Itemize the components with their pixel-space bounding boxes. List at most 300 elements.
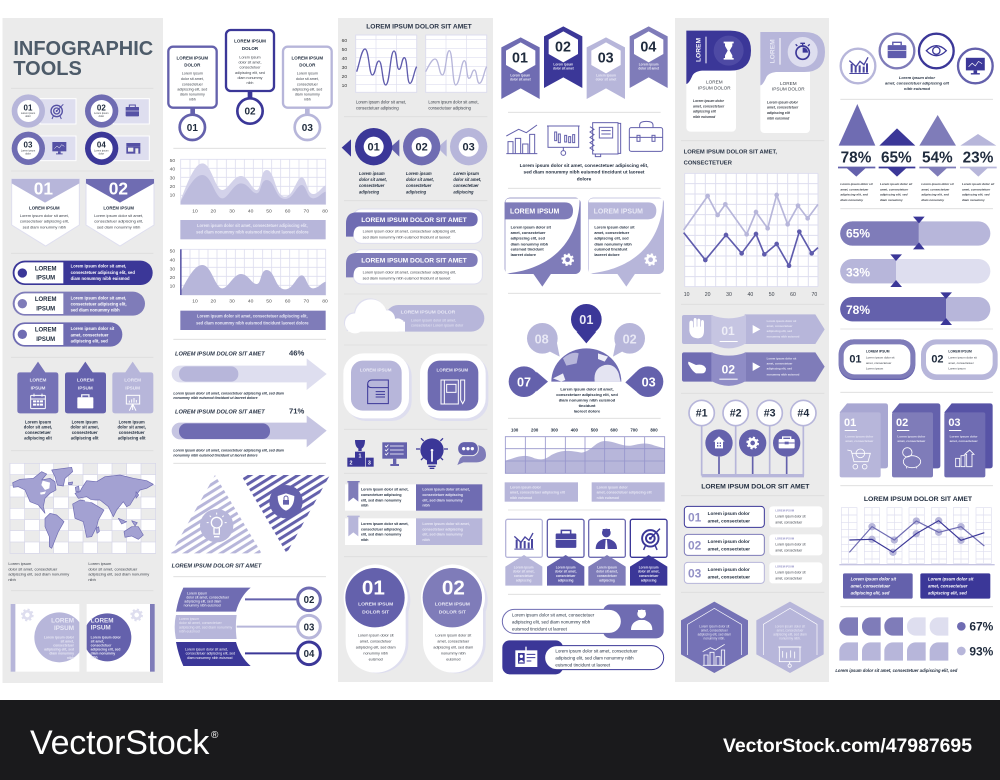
speech card 2: diam nonummy nibh	[594, 242, 632, 246]
area chart 1	[170, 158, 328, 214]
pill labels: consectetuer adipiscing elit,	[71, 301, 127, 306]
speech card 1: amet, consectetuer	[511, 231, 546, 235]
tab card: hourglass: Lorem ipsum dolor	[693, 99, 725, 103]
icon: trophy podium: 2	[350, 460, 353, 466]
pill card 02	[921, 339, 998, 380]
triangle percentage chart: Lorem ipsum dolor sit	[880, 182, 913, 186]
lollipop card 02	[421, 564, 488, 673]
numbered circle badges: 04	[97, 140, 106, 149]
area chart 2: 70	[304, 299, 309, 305]
triangle percentage chart: Lorem ipsum dolor sit	[840, 182, 874, 186]
numbered callouts: dolor sit amet,	[181, 77, 204, 81]
numbered circle badges: 01	[24, 103, 33, 112]
icon: trophy podium: 1	[359, 454, 362, 460]
numbered arrow steps: consectetuer	[406, 183, 432, 188]
numbered callouts: adipiscing elit, sed	[235, 71, 265, 75]
numbered arrow steps: Lorem ipsum	[453, 171, 479, 176]
step row 01	[682, 314, 825, 348]
ribbon row 2: elit, sed diam nonummy	[422, 533, 463, 537]
dual line chart	[684, 173, 818, 298]
list row 03: Lorem ipsum dolor sit	[775, 571, 806, 575]
tabbed icon cards: Lorem ipsum	[72, 419, 98, 424]
list row 02: Lorem ipsum dolor	[708, 539, 750, 544]
column 5 top	[681, 31, 825, 348]
area chart 1: 20	[170, 184, 175, 190]
curved list: Lorem ipsum dolor sit amet,	[185, 648, 228, 652]
shield cards: consectetuer adipiscing elit,	[94, 219, 143, 224]
area chart 2	[170, 249, 328, 305]
column 6 top	[838, 34, 997, 329]
shield cards: sed diam nonummy nibh	[23, 224, 66, 229]
icon: pointing hand	[688, 362, 706, 373]
list row 02: amet, consectetuer	[708, 547, 750, 552]
ribbon row 2: Lorem ipsum dolor sit amet,	[422, 522, 470, 526]
pill card 01: Lorem ipsum	[866, 366, 884, 370]
caption bar 1	[180, 220, 326, 239]
icon: presentation board	[126, 395, 140, 411]
stacked card 01: 01	[844, 417, 856, 429]
area chart 1: 50	[170, 158, 175, 164]
list row 03: amet, consectetuer	[708, 575, 750, 580]
list row 03	[684, 562, 822, 583]
lollipop card 02: LOREM IPSUM	[435, 602, 470, 608]
icon tiles with pentagons: consectetuer	[639, 574, 659, 578]
area chart with top axis: 700	[630, 427, 638, 432]
chart heading: LOREM IPSUM DOLOR SIT AMET	[864, 496, 973, 503]
profile callout 2: adipiscing elit, sed diam nonummy nibh	[555, 656, 634, 661]
globe caption: laoreet dolore	[574, 409, 601, 414]
dual line chart: 30	[726, 292, 732, 298]
numbered callouts: dolor sit amet,	[296, 77, 319, 81]
speech card 2: LOREM IPSUM	[594, 209, 643, 216]
pill card 01	[839, 339, 915, 380]
hash tree diagram	[689, 400, 816, 477]
pill labels: amet, consectetuer	[71, 332, 109, 337]
circle cards: IPSUM	[91, 624, 111, 631]
stacked card 02: 02	[896, 417, 908, 429]
curved list: Lorem ipsum	[179, 617, 199, 621]
numbered arrow steps: dolor sit amet,	[359, 177, 387, 182]
tab card: stopwatch: nibh euismod	[767, 116, 790, 120]
progress arrow 71%: 71%	[289, 406, 305, 415]
line charts: Lorem ipsum dolor sit amet,	[428, 99, 479, 104]
numbered circle badges	[12, 94, 149, 165]
area chart 2: 40	[248, 299, 254, 305]
circle cards: nibh	[91, 656, 98, 660]
numbered circle badges: 03	[24, 140, 33, 149]
triangle percentage chart: 78%	[841, 150, 872, 167]
lollipop card 01: nonummy nibh	[363, 652, 388, 656]
speech card 1: adipiscing elit, sed	[511, 237, 546, 241]
shield cards: Lorem ipsum dolor sit amet,	[94, 213, 143, 218]
tabbed icon cards: dolor sit amet,	[70, 425, 99, 430]
banner card 1: sed diam nonummy nibh euismod tincidunt ut laoreet	[363, 235, 451, 239]
triangle percentage chart: 23%	[963, 150, 994, 167]
lollipop card 02: Lorem ipsum dolor sit	[435, 634, 472, 638]
list row 03: amet, consectetuer	[775, 576, 802, 580]
tabbed icon cards: LOREM	[77, 378, 94, 383]
chart notes: amet, consectetuer adipiscing elit	[597, 491, 652, 495]
cloud callout	[344, 298, 484, 333]
tabbed icon cards: dolor sit amet,	[24, 425, 52, 430]
line charts: Lorem ipsum dolor sit amet,	[356, 99, 406, 104]
numbered callouts: DOLOR	[299, 63, 316, 68]
area chart 2: 20	[211, 299, 216, 305]
profile callout 1: euismod tincidunt ut laoreet	[512, 626, 568, 631]
icon: trophy podium: 3	[368, 460, 371, 466]
profile callout 1: Lorem ipsum dolor sit amet, consectetuer	[512, 613, 595, 618]
footer bar: VectorStock	[30, 724, 210, 762]
map captions: nibh	[8, 577, 16, 582]
banner card 2	[346, 250, 482, 284]
progress arrow 46%	[172, 349, 327, 400]
progress arrow 71%: nonummy nibh euismod tincidunt ut laoreet dolore	[173, 453, 258, 457]
area chart 2: 40	[170, 257, 175, 263]
lollipop card 01: 01	[362, 576, 385, 599]
circle cards: diam nonummy	[49, 652, 74, 656]
chart notes: nibh euismod	[597, 496, 619, 500]
triangle percentage chart: 65%	[881, 150, 912, 167]
hexagon card 1: nonummy nibh.	[704, 637, 725, 641]
icon tiles with pentagons: consectetuer	[556, 574, 576, 578]
map pin 08	[527, 323, 560, 357]
tab card: hourglass: LOREM	[695, 38, 702, 62]
pill labels: IPSUM	[36, 337, 55, 343]
list row 03: 03	[688, 567, 702, 581]
icon: candlestick board	[547, 126, 580, 155]
stacked card 02	[892, 403, 940, 477]
panel: column 1 background	[2, 18, 163, 683]
progress arrow 71%: Lorem ipsum dolor sit amet, consectetuer adipiscing elit, sed diam	[173, 449, 284, 453]
tab card: stopwatch: Lorem ipsum dolor	[767, 100, 799, 104]
step row 01: Lorem ipsum dolor sit	[767, 319, 796, 323]
line charts: 10	[342, 83, 347, 89]
numbered callouts	[168, 30, 332, 140]
globe caption	[556, 386, 618, 414]
area chart with top axis: 400	[571, 427, 579, 432]
pill card 01: LOREM IPSUM	[866, 349, 890, 353]
stacked card 01: amet, consectetuer	[845, 439, 874, 443]
icon tiles with pentagons: Lorem ipsum	[597, 565, 617, 569]
triangle percentage chart: diam nonummy	[962, 198, 985, 202]
map captions: Lorem ipsum	[8, 561, 32, 566]
pill labels: IPSUM	[36, 276, 55, 282]
circle cards: nibh	[67, 656, 74, 660]
hexagon card 1: amet, consectetuer	[701, 629, 728, 633]
pill card 01: amet, consectetuer	[866, 361, 891, 365]
stacked card 02: amet, consectetuer	[897, 439, 926, 443]
lollipop card 02: DOLOR SIT	[439, 610, 466, 616]
closing caption: Lorem ipsum dolor sit amet, consectetuer adipiscing elit, sed	[835, 668, 958, 673]
icon: chat bubbles	[457, 442, 486, 465]
shield cards: LOREM IPSUM	[103, 205, 134, 210]
curved list: dolor sit amet, consectetuer	[186, 595, 230, 599]
numbered arrow steps: consectetuer	[359, 183, 385, 188]
icon tile: book: LOREM IPSUM	[360, 368, 392, 373]
icon circles	[841, 34, 993, 91]
hexagon ribbons: Lorem ipsum	[553, 62, 573, 66]
pill labels: Lorem ipsum dolor sit amet,	[71, 295, 126, 300]
column 2 top	[168, 30, 332, 339]
dual line chart: 70	[811, 292, 817, 298]
tab card: stopwatch: LOREM	[780, 81, 797, 86]
section heading: CONSECTETUER	[684, 161, 733, 167]
icon tiles with pentagons: Lorem ipsum	[514, 565, 534, 569]
line charts	[342, 35, 487, 111]
caption bar 2: Lorem ipsum dolor sit amet, consectetuer adipiscing elit,	[197, 314, 308, 319]
hexagon ribbons: 04	[640, 39, 656, 55]
area chart with top axis: 100	[511, 427, 519, 432]
triangle percentage chart	[838, 104, 997, 202]
icon tiles with pentagons: adipiscing	[516, 578, 532, 582]
circle cards: sit amet,	[60, 640, 74, 644]
lollipop card 01: DOLOR SIT	[362, 610, 389, 616]
list row 03: Lorem ipsum dolor	[708, 567, 750, 572]
step row 01: nonummy nibh euismod	[767, 335, 800, 339]
numbered circle badges: Lorem ipsum	[94, 149, 109, 152]
ribbon row 2: consectetuer adipiscing	[422, 527, 463, 531]
hexagon ribbons: dolor sit amet	[638, 67, 660, 71]
numbered callouts: DOLOR	[242, 46, 259, 51]
section heading: LOREM IPSUM DOLOR SIT AMET	[366, 24, 472, 31]
triangle percentage chart: diam nonummy	[880, 198, 903, 202]
numbered callouts: 03	[302, 123, 313, 134]
profile callout 2: euismod tincidunt ut laoreet	[555, 662, 611, 667]
icon circles: nibh euismod	[904, 86, 931, 91]
banner card 2: LOREM IPSUM DOLOR SIT AMET	[361, 258, 467, 265]
circle cards: diam nonummy	[91, 652, 115, 656]
cloud callout: consectetuer Lorem ipsum dolor	[411, 323, 464, 327]
triangle percentage chart: amet, consectetuer	[880, 187, 909, 191]
tabbed icon cards	[17, 362, 153, 440]
icon tiles with pentagons: consectetuer	[514, 574, 534, 578]
map captions: adipiscing elit, sed diam nonummy	[8, 572, 69, 577]
numbered circle badges: dolor	[25, 152, 31, 155]
numbered arrow steps	[342, 128, 487, 194]
dual line chart: 20	[705, 292, 711, 298]
list row 01: amet, consectetuer	[708, 519, 750, 524]
map pin 07	[509, 366, 548, 397]
hexagon ribbons: 02	[555, 39, 571, 55]
numbered arrow steps: 03	[463, 142, 475, 154]
map pin 03: 03	[642, 375, 656, 389]
hexagon card 2: Lorem ipsum dolor sit	[775, 625, 805, 629]
footer bar: ®	[211, 730, 219, 741]
ribbon row 2: Lorem ipsum dolor sit amet,	[361, 522, 409, 526]
dual line chart: 10	[684, 292, 690, 298]
lollipop card 01	[344, 564, 410, 673]
icon: hand	[689, 318, 704, 338]
column 1 top	[11, 38, 154, 347]
hexagon card 2: nonummy nibh.	[779, 637, 801, 641]
tabbed icon cards: LOREM	[124, 378, 141, 383]
icon: shield lock	[269, 485, 303, 518]
speech card 1: Lorem ipsum dolor sit	[511, 225, 552, 229]
icon: growth chart	[506, 125, 537, 154]
circle cards: Lorem ipsum dolor	[91, 636, 122, 640]
triangle percentage chart: amet, consectetuer	[962, 187, 991, 191]
section heading	[684, 149, 777, 167]
tabbed icon cards: IPSUM	[31, 386, 45, 391]
footer bar: VectorStock.com/47987695	[723, 735, 972, 757]
tabbed icon cards: Lorem ipsum	[119, 419, 145, 424]
triangle percentage chart: amet, consectetuer	[840, 187, 869, 191]
area chart with top axis	[505, 427, 665, 473]
step row 01: 01	[721, 324, 735, 338]
area chart 1: 40	[248, 208, 254, 214]
icon tiles with pentagons: adipiscing	[558, 578, 574, 582]
shield cards: LOREM IPSUM	[29, 205, 60, 210]
curved list: Lorem ipsum	[187, 591, 207, 595]
list row 01	[684, 506, 822, 527]
icon: notebook	[590, 123, 621, 157]
ribbon row 1: elit, sed diam nonummy	[422, 498, 463, 502]
stacked card 03: amet, consectetuer	[950, 439, 979, 443]
progress arrow 46%: LOREM IPSUM DOLOR SIT AMET	[175, 352, 265, 358]
step row 02: adipiscing elit, sed	[767, 367, 792, 371]
icon row caption: dolore	[577, 176, 592, 182]
numbered callouts: Lorem ipsum	[239, 56, 261, 60]
map pin 01	[571, 304, 602, 343]
ribbon row 2: elit, sed diam nonummy	[361, 533, 401, 537]
speech card 2: Lorem ipsum dolor sit	[594, 225, 635, 229]
banner card 1: Lorem ipsum dolor sit amet, consectetuer adipiscing elit,	[363, 230, 456, 234]
triangle percentage chart: adipiscing elit, sed	[962, 193, 990, 197]
hash tree diagram: #2	[730, 408, 742, 420]
circle cards: adipiscing elit, sed	[44, 648, 74, 652]
line charts: consectetuer adipiscing	[428, 106, 471, 111]
pictogram percentages	[839, 617, 994, 661]
area chart with top axis: 500	[591, 427, 599, 432]
icon tile: book	[343, 353, 412, 421]
icon: toolbox	[779, 437, 795, 448]
profile callout 1: adipiscing elit, sed diam nonummy nibh	[512, 620, 591, 625]
hexagon ribbons: dolor sit amet	[596, 78, 617, 82]
caption bar 2: sed diam nonummy nibh euismod tincidunt laoreet dolore	[196, 320, 309, 325]
circle cards: Lorem ipsum dolor	[44, 636, 75, 640]
numbered callouts: 01	[187, 123, 198, 134]
icon: house	[713, 436, 725, 448]
numbered circle badges: Lorem ipsum	[21, 149, 35, 152]
icon: id badge	[515, 647, 537, 667]
banner card 2: sed diam nonummy nibh euismod tincidunt ut laoreet	[363, 276, 451, 280]
numbered callouts: adipiscing elit, sed	[177, 88, 207, 92]
numbered circle badges: dolor	[99, 115, 104, 118]
pill labels: IPSUM	[36, 306, 55, 312]
ribbon row 1: consectetuer adipiscing	[422, 493, 463, 497]
map captions	[8, 561, 149, 582]
icon tiles with pentagons: adipiscing	[641, 578, 657, 582]
tab card: stopwatch: amet, consectetuer	[767, 106, 799, 110]
caption bar 1: sed diam nonummy nibh euismod tincidunt laoreet dolore	[196, 230, 309, 235]
chart captions: amet, consectetuer	[928, 583, 968, 588]
tabbed icon cards: consectetuer	[119, 430, 145, 435]
chart captions: adipiscing elit, sed	[928, 591, 967, 596]
chart captions: amet, consectetuer	[851, 583, 890, 588]
map captions: adipiscing elit, sed diam nonummy	[88, 572, 149, 577]
tab card: stopwatch: LOREM	[769, 39, 776, 63]
numbered arrow steps: adipiscing	[406, 189, 427, 194]
area chart 2: 60	[285, 299, 291, 305]
stacked card 03: 03	[948, 417, 961, 429]
map pin 07: 07	[517, 375, 531, 389]
numbered callouts: nibh	[189, 98, 196, 102]
tab card: hourglass: LOREM	[706, 80, 723, 85]
progress pill 33%: 33%	[846, 265, 870, 279]
banner card 1: LOREM IPSUM DOLOR SIT AMET	[361, 217, 467, 224]
numbered arrow steps: dolor sit amet,	[453, 177, 481, 182]
list row 01: LOREM IPSUM	[775, 508, 795, 512]
profile callout 2	[502, 640, 664, 674]
pill labels: adipiscing elit, sed	[71, 338, 108, 343]
title: TOOLS	[13, 58, 82, 80]
dual line chart: 50	[769, 292, 775, 298]
tabbed icon cards: adipiscing elit	[118, 435, 146, 440]
chart notes: Lorem ipsum dolor	[597, 485, 628, 489]
chart notes: Lorem ipsum dolor	[510, 485, 542, 489]
numbered circle badges: Lorem ipsum	[21, 112, 35, 115]
numbered callouts: diam nonummy	[237, 76, 263, 80]
outline icon row	[506, 121, 663, 157]
pictogram percentages: 67%	[969, 620, 994, 634]
step row 02: 02	[722, 362, 735, 376]
step row 02	[682, 352, 825, 386]
pill card 01: 01	[849, 354, 862, 366]
chart captions: adipiscing elit, sed	[851, 591, 890, 596]
numbered callouts: consectetuer	[297, 82, 319, 86]
icon: calendar	[31, 394, 45, 409]
triangle percentage chart: adipiscing elit, sed	[880, 193, 908, 197]
icon: briefcase	[77, 395, 93, 408]
pictogram percentages: 93%	[969, 644, 994, 658]
step row 01: amet, consectetuer	[767, 324, 793, 328]
progress arrow 71%: LOREM IPSUM DOLOR SIT AMET	[175, 409, 265, 415]
numbered callouts: Lorem ipsum	[182, 72, 203, 76]
stacked card 03	[944, 403, 993, 477]
hexagon card 2: adipiscing elit, sed diam	[773, 633, 807, 637]
hash tree diagram: #1	[696, 408, 708, 420]
hexagon ribbons: dolor sit amet	[510, 78, 532, 82]
area chart 2: 50	[170, 249, 175, 255]
numbered callouts: LOREM IPSUM	[177, 55, 208, 60]
lollipop card 01: LOREM IPSUM	[358, 602, 393, 608]
icon row caption: sed diam nonummy nibh euismod tincidunt ut laoreet	[524, 170, 645, 176]
cloud callout: Lorem ipsum dolor sit amet,	[411, 318, 456, 322]
line charts: consectetuer adipiscing	[356, 106, 399, 111]
shield cards: sed diam nonummy nibh	[97, 224, 140, 229]
numbered callouts: nibh	[247, 81, 253, 85]
map pin 02: 02	[623, 332, 637, 346]
step row 02: amet, consectetuer	[767, 362, 793, 366]
pill labels: LOREM	[35, 266, 56, 272]
line charts: 60	[342, 38, 347, 44]
speech card 2: euismod tincidunt	[594, 248, 628, 252]
pill labels: Lorem ipsum dolor sit	[71, 326, 115, 331]
map captions: Lorem ipsum	[88, 561, 112, 566]
area chart 1: 40	[170, 167, 175, 173]
panel: column 3 background	[338, 18, 493, 682]
ribbon row 1: consectetuer adipiscing	[361, 493, 402, 497]
triangle percentage chart: diam nonummy	[840, 198, 863, 202]
curved list	[175, 588, 320, 666]
numbered circle badges: 02	[97, 103, 106, 112]
icon: trophy podium	[347, 440, 374, 467]
numbered arrow steps: 02	[416, 142, 428, 154]
cloud callout: LOREM IPSUM DOLOR	[401, 309, 456, 315]
tab card: hourglass: nibh euismod	[693, 115, 716, 119]
chart captions: Lorem ipsum dolor sit	[928, 577, 974, 582]
progress pill 65%	[840, 217, 990, 249]
